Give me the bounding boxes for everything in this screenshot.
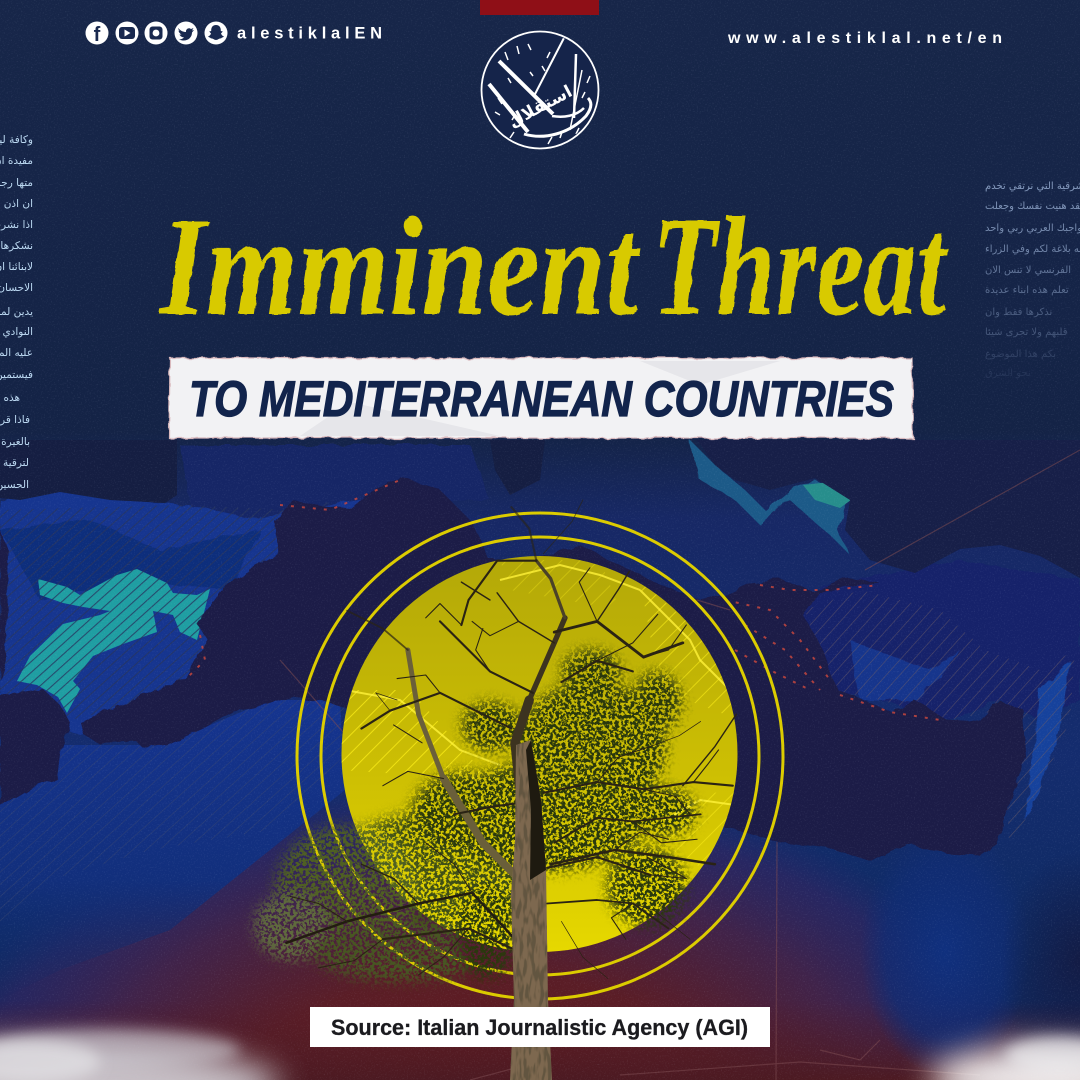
Arabic text column: right: واجبك العربي ربي واحد xyxy=(985,223,1080,234)
subtitle banner: TO MEDITERRANEAN COUNTRIES xyxy=(189,371,894,427)
map: Turkey and Levant land xyxy=(800,560,1080,850)
icon: twitter xyxy=(174,22,198,44)
Arabic text column: right xyxy=(985,181,1080,379)
Arabic text column: right: نذكرها فقط وان xyxy=(985,307,1052,318)
Arabic text column: left xyxy=(0,134,33,491)
Arabic text column: left: ان اذن xyxy=(4,198,33,210)
yellow sun disc xyxy=(340,556,740,952)
Arabic text column: left: النوادي xyxy=(2,326,33,338)
website URL: www.alestiklal.net/en xyxy=(727,30,1002,47)
social handle: alestiklalEN xyxy=(237,24,382,42)
clouds: bottom corners xyxy=(0,1030,1080,1080)
Arabic text column: right: الفرنسي لا تنس الان xyxy=(985,265,1071,276)
icon: facebook xyxy=(86,22,108,46)
map: thin red-zone lines xyxy=(280,450,1080,1080)
tree trunk shadow xyxy=(526,740,546,880)
Arabic text column: right: نحو الشرق xyxy=(985,368,1031,379)
Arabic text column: right: قلبهم ولا تجرى شيئا xyxy=(985,327,1068,338)
icon: snapchat xyxy=(204,22,228,44)
source label xyxy=(310,1007,770,1047)
tree branches xyxy=(286,500,736,979)
social icons row xyxy=(86,22,228,46)
map: red coastline specks xyxy=(185,480,940,720)
map: teal waters north-east xyxy=(690,440,850,555)
icon: instagram xyxy=(144,22,168,44)
tree xyxy=(252,500,736,1080)
map: Iberia blue land xyxy=(0,445,490,735)
map: teal region over Iberia xyxy=(17,569,210,713)
icon: youtube xyxy=(116,22,138,44)
Arabic text column: right: تعلم هذه ابناء عديدة xyxy=(985,285,1069,296)
map: North Africa blue land xyxy=(0,700,345,1000)
Arabic text column: right: بكم هذا الموضوع xyxy=(985,349,1056,360)
concentric rings xyxy=(297,513,783,999)
Arabic text column: left: فاذا قر xyxy=(0,414,30,426)
red top tab xyxy=(480,0,599,15)
title: Threat xyxy=(652,187,949,345)
subtitle banner xyxy=(169,358,913,438)
title: Imminent xyxy=(158,187,641,345)
map: dark top blocks xyxy=(0,440,1080,578)
icon: facebook: f xyxy=(94,24,101,46)
tree trunk xyxy=(510,740,552,1080)
source label: Source: Italian Journalistic Agency (AGI) xyxy=(331,1015,748,1040)
logo: calligraphic emblem: استقلال xyxy=(505,82,576,132)
tree foliage: centre and right xyxy=(410,648,695,925)
map: Iberia hatch xyxy=(0,500,340,720)
map: Mediterranean sea shape xyxy=(0,477,1027,862)
logo: calligraphic emblem xyxy=(482,32,598,148)
tree foliage: lower left xyxy=(252,810,525,980)
map: teal spot xyxy=(803,482,855,508)
Arabic text column: left: نشكرها xyxy=(0,240,33,252)
